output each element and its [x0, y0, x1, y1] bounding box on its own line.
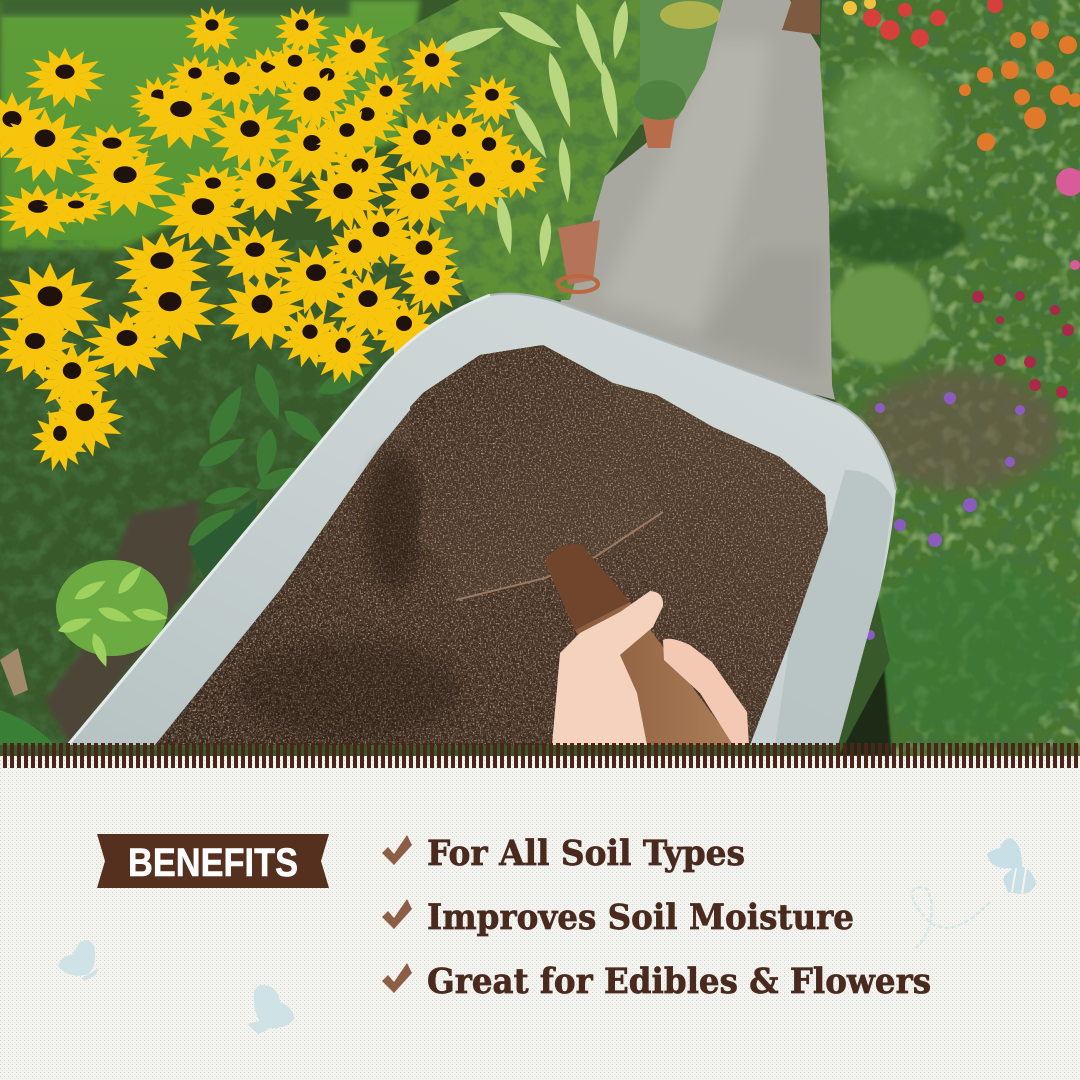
- plant above small pot: [640, 0, 723, 125]
- benefit 1: For All Soil Types: [427, 833, 745, 874]
- left foliage bed: [0, 240, 470, 750]
- lawn and dark background foliage: [0, 0, 890, 756]
- black-eyed susan flowers: [0, 6, 547, 473]
- hand: [552, 591, 749, 745]
- butterfly decoration bottom: [247, 985, 294, 1034]
- stitched stripe border: [0, 743, 1080, 768]
- benefit 3: Great for Edibles & Flowers: [427, 961, 931, 1002]
- benefit list: [382, 833, 931, 1002]
- photo: garden with wheelbarrow: [0, 0, 1080, 756]
- orange and red garden flowers: [843, 0, 1080, 640]
- bee decoration: [912, 838, 1036, 950]
- wheelbarrow tray: [68, 294, 896, 745]
- pavement path: [530, 0, 836, 400]
- shovel handle: [545, 544, 735, 745]
- large terracotta pot: [558, 220, 600, 285]
- potted pepper plants: [380, 0, 723, 300]
- terracotta pallet at top of path: [782, 0, 820, 35]
- fabric panel: [0, 756, 1080, 1080]
- right garden bed: [820, 0, 1080, 756]
- butterfly decoration left: [58, 940, 99, 981]
- benefits ribbon: [97, 834, 329, 888]
- soil: [150, 340, 840, 750]
- small terracotta pot: [642, 118, 675, 148]
- benefit 2: Improves Soil Moisture: [427, 897, 854, 938]
- benefits ribbon: BENEFITS: [128, 841, 298, 885]
- shovel full of soil: [405, 340, 665, 602]
